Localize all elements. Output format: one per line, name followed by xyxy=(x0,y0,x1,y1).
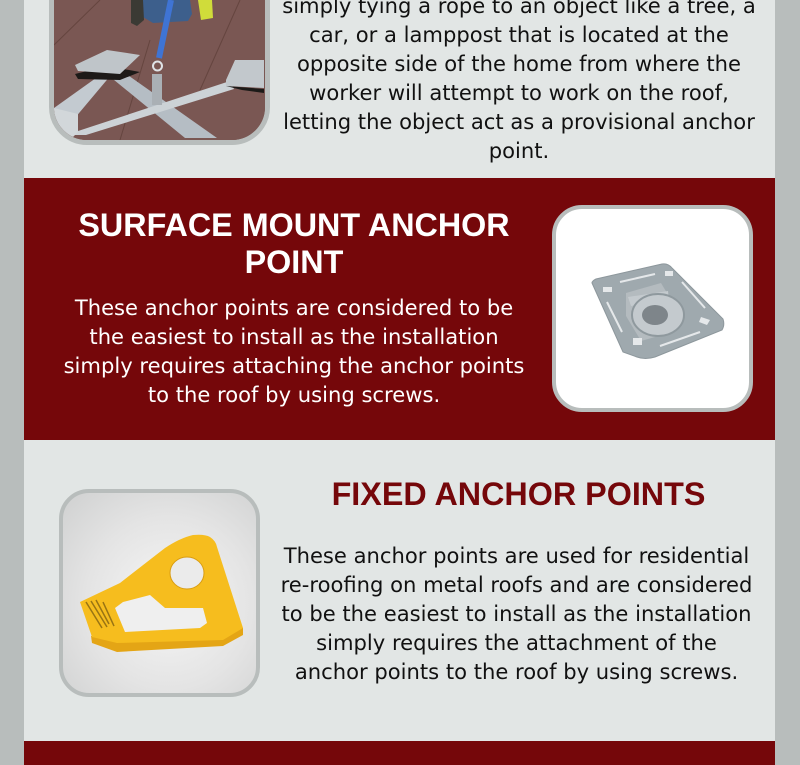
heading: fixed anchor points: FIXED ANCHOR POINTS xyxy=(332,476,705,512)
image: fixed yellow anchor xyxy=(59,489,260,697)
heading: surface mount anchor point: SURFACE MOUNT ANCHOR xyxy=(78,207,510,243)
panel: next section band xyxy=(24,741,775,765)
panel: surface mount anchor point xyxy=(24,178,775,440)
heading: surface mount anchor point: POINT xyxy=(245,244,343,280)
text: fixed anchor description xyxy=(281,543,752,684)
text: fixed anchor description: anchor points to the roof by using screws. xyxy=(295,659,738,684)
text: fixed anchor description: These anchor points are used for residential xyxy=(284,543,749,568)
text: temporary anchor description xyxy=(282,0,756,163)
text: surface mount description xyxy=(64,295,524,407)
text: fixed anchor description: re-roofing on metal roofs and are considered xyxy=(281,572,752,597)
text: temporary anchor description: worker will attempt to work on the roof, xyxy=(309,80,729,105)
photo: roof anchor base on roof xyxy=(49,0,270,145)
text: surface mount description: simply requires attaching the anchor points xyxy=(64,353,524,378)
text: surface mount description: These anchor points are considered to be xyxy=(75,295,513,320)
text: temporary anchor description: point. xyxy=(489,138,549,163)
heading: surface mount anchor point xyxy=(78,207,510,280)
text: surface mount description: the easiest to install as the installation xyxy=(89,324,499,349)
panel: temporary anchor (top) xyxy=(24,0,775,178)
text: fixed anchor description: simply requires the attachment of the xyxy=(316,630,717,655)
panel: fixed anchor points xyxy=(24,440,775,741)
text: temporary anchor description: opposite side of the home from where the xyxy=(297,51,741,76)
text: surface mount description: to the roof by using screws. xyxy=(148,382,440,407)
text: temporary anchor description: letting the object act as a provisional anchor xyxy=(283,109,755,134)
text: temporary anchor description: car, or a lamppost that is located at the xyxy=(309,22,729,47)
text: fixed anchor description: to be the easiest to install as the installation xyxy=(281,601,752,626)
image: surface mount plate xyxy=(552,205,753,412)
